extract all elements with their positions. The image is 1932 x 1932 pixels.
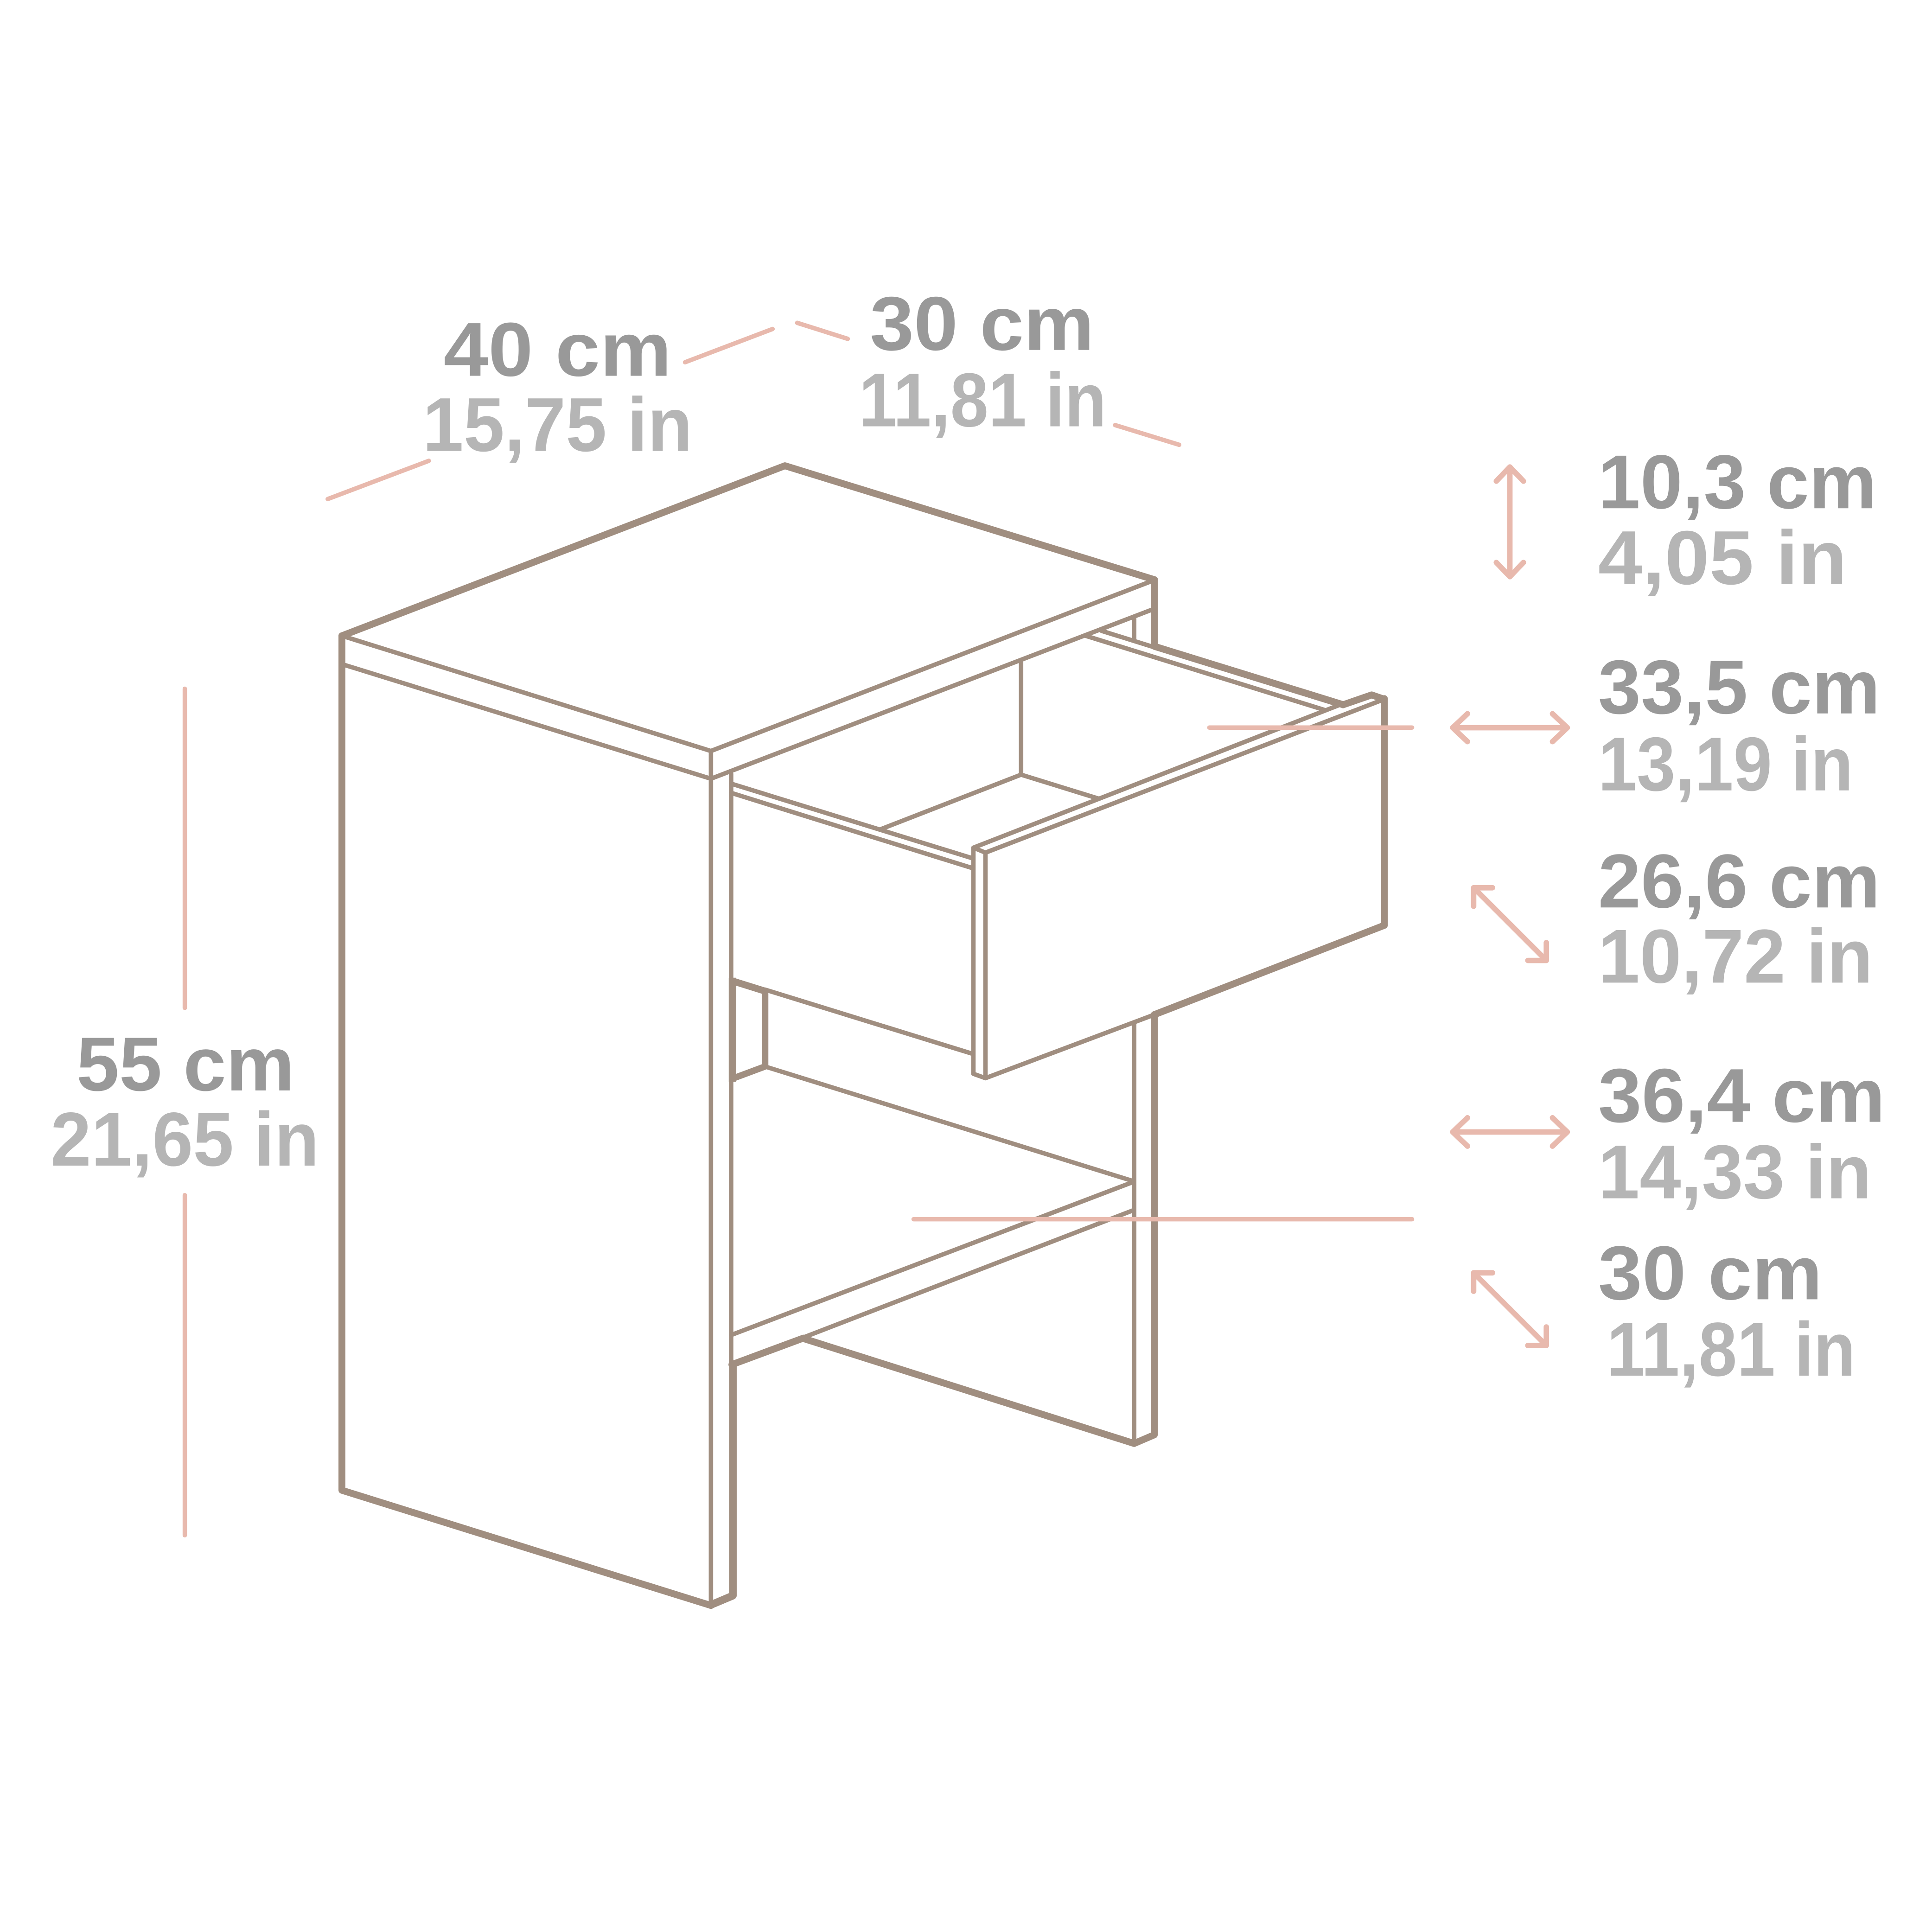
height label: 55 cm [77, 1021, 294, 1107]
width label: 40 cm [444, 307, 671, 392]
drawer width label: 13,19 in [1598, 721, 1853, 807]
shelf width label: 36,4 cm [1598, 1053, 1885, 1138]
shelf width label [1598, 1053, 1885, 1214]
dimension: shelf width [1453, 1053, 1885, 1214]
depth label: 30 cm [870, 281, 1094, 366]
shelf width label: 14,33 in [1598, 1129, 1872, 1214]
width label: 15,75 in [423, 382, 693, 467]
drawer depth label: 10,72 in [1598, 913, 1873, 999]
lower shelf and back rail [731, 981, 1134, 1443]
guide lines [184, 689, 185, 1535]
dimension: drawer width [1453, 644, 1880, 807]
depth label: 11,81 in [859, 357, 1106, 443]
dimension: overall width [328, 307, 772, 499]
guide lines [328, 329, 772, 499]
drawer depth label [1598, 838, 1880, 999]
dimension: shelf depth [1473, 1230, 1855, 1392]
dimension: overall height [51, 689, 319, 1535]
dimension: drawer height [1496, 439, 1876, 600]
icon: horizontal arrow [1453, 714, 1567, 742]
height label [51, 1021, 319, 1182]
shelf depth label: 30 cm [1598, 1230, 1822, 1315]
height label: 21,65 in [51, 1097, 319, 1182]
drawer height label [1598, 439, 1876, 600]
dimension: drawer depth [1473, 838, 1880, 999]
depth label [859, 281, 1106, 443]
drawer depth label: 26,6 cm [1598, 838, 1880, 924]
shelf depth label: 11,81 in [1607, 1307, 1855, 1392]
drawer width label [1598, 644, 1880, 807]
back and right side panel [1085, 617, 1343, 1443]
open drawer [731, 661, 1384, 1078]
icon: vertical arrow [1496, 467, 1524, 577]
shelf depth label [1598, 1230, 1855, 1392]
icon: horizontal arrow [1453, 1118, 1567, 1146]
dimension: overall depth [797, 281, 1179, 445]
tabletop [342, 466, 1154, 779]
drawer height label: 10,3 cm [1598, 439, 1876, 524]
drawer and shelf reference lines [914, 727, 1412, 1219]
icon: diagonal arrow [1473, 888, 1546, 961]
guide lines [797, 323, 1179, 445]
left side panel [342, 636, 733, 1606]
width label [423, 307, 693, 467]
drawer height label: 4,05 in [1598, 515, 1847, 600]
icon: diagonal arrow [1473, 1273, 1546, 1345]
drawer width label: 33,5 cm [1598, 644, 1880, 730]
nightstand line drawing [342, 466, 1384, 1606]
